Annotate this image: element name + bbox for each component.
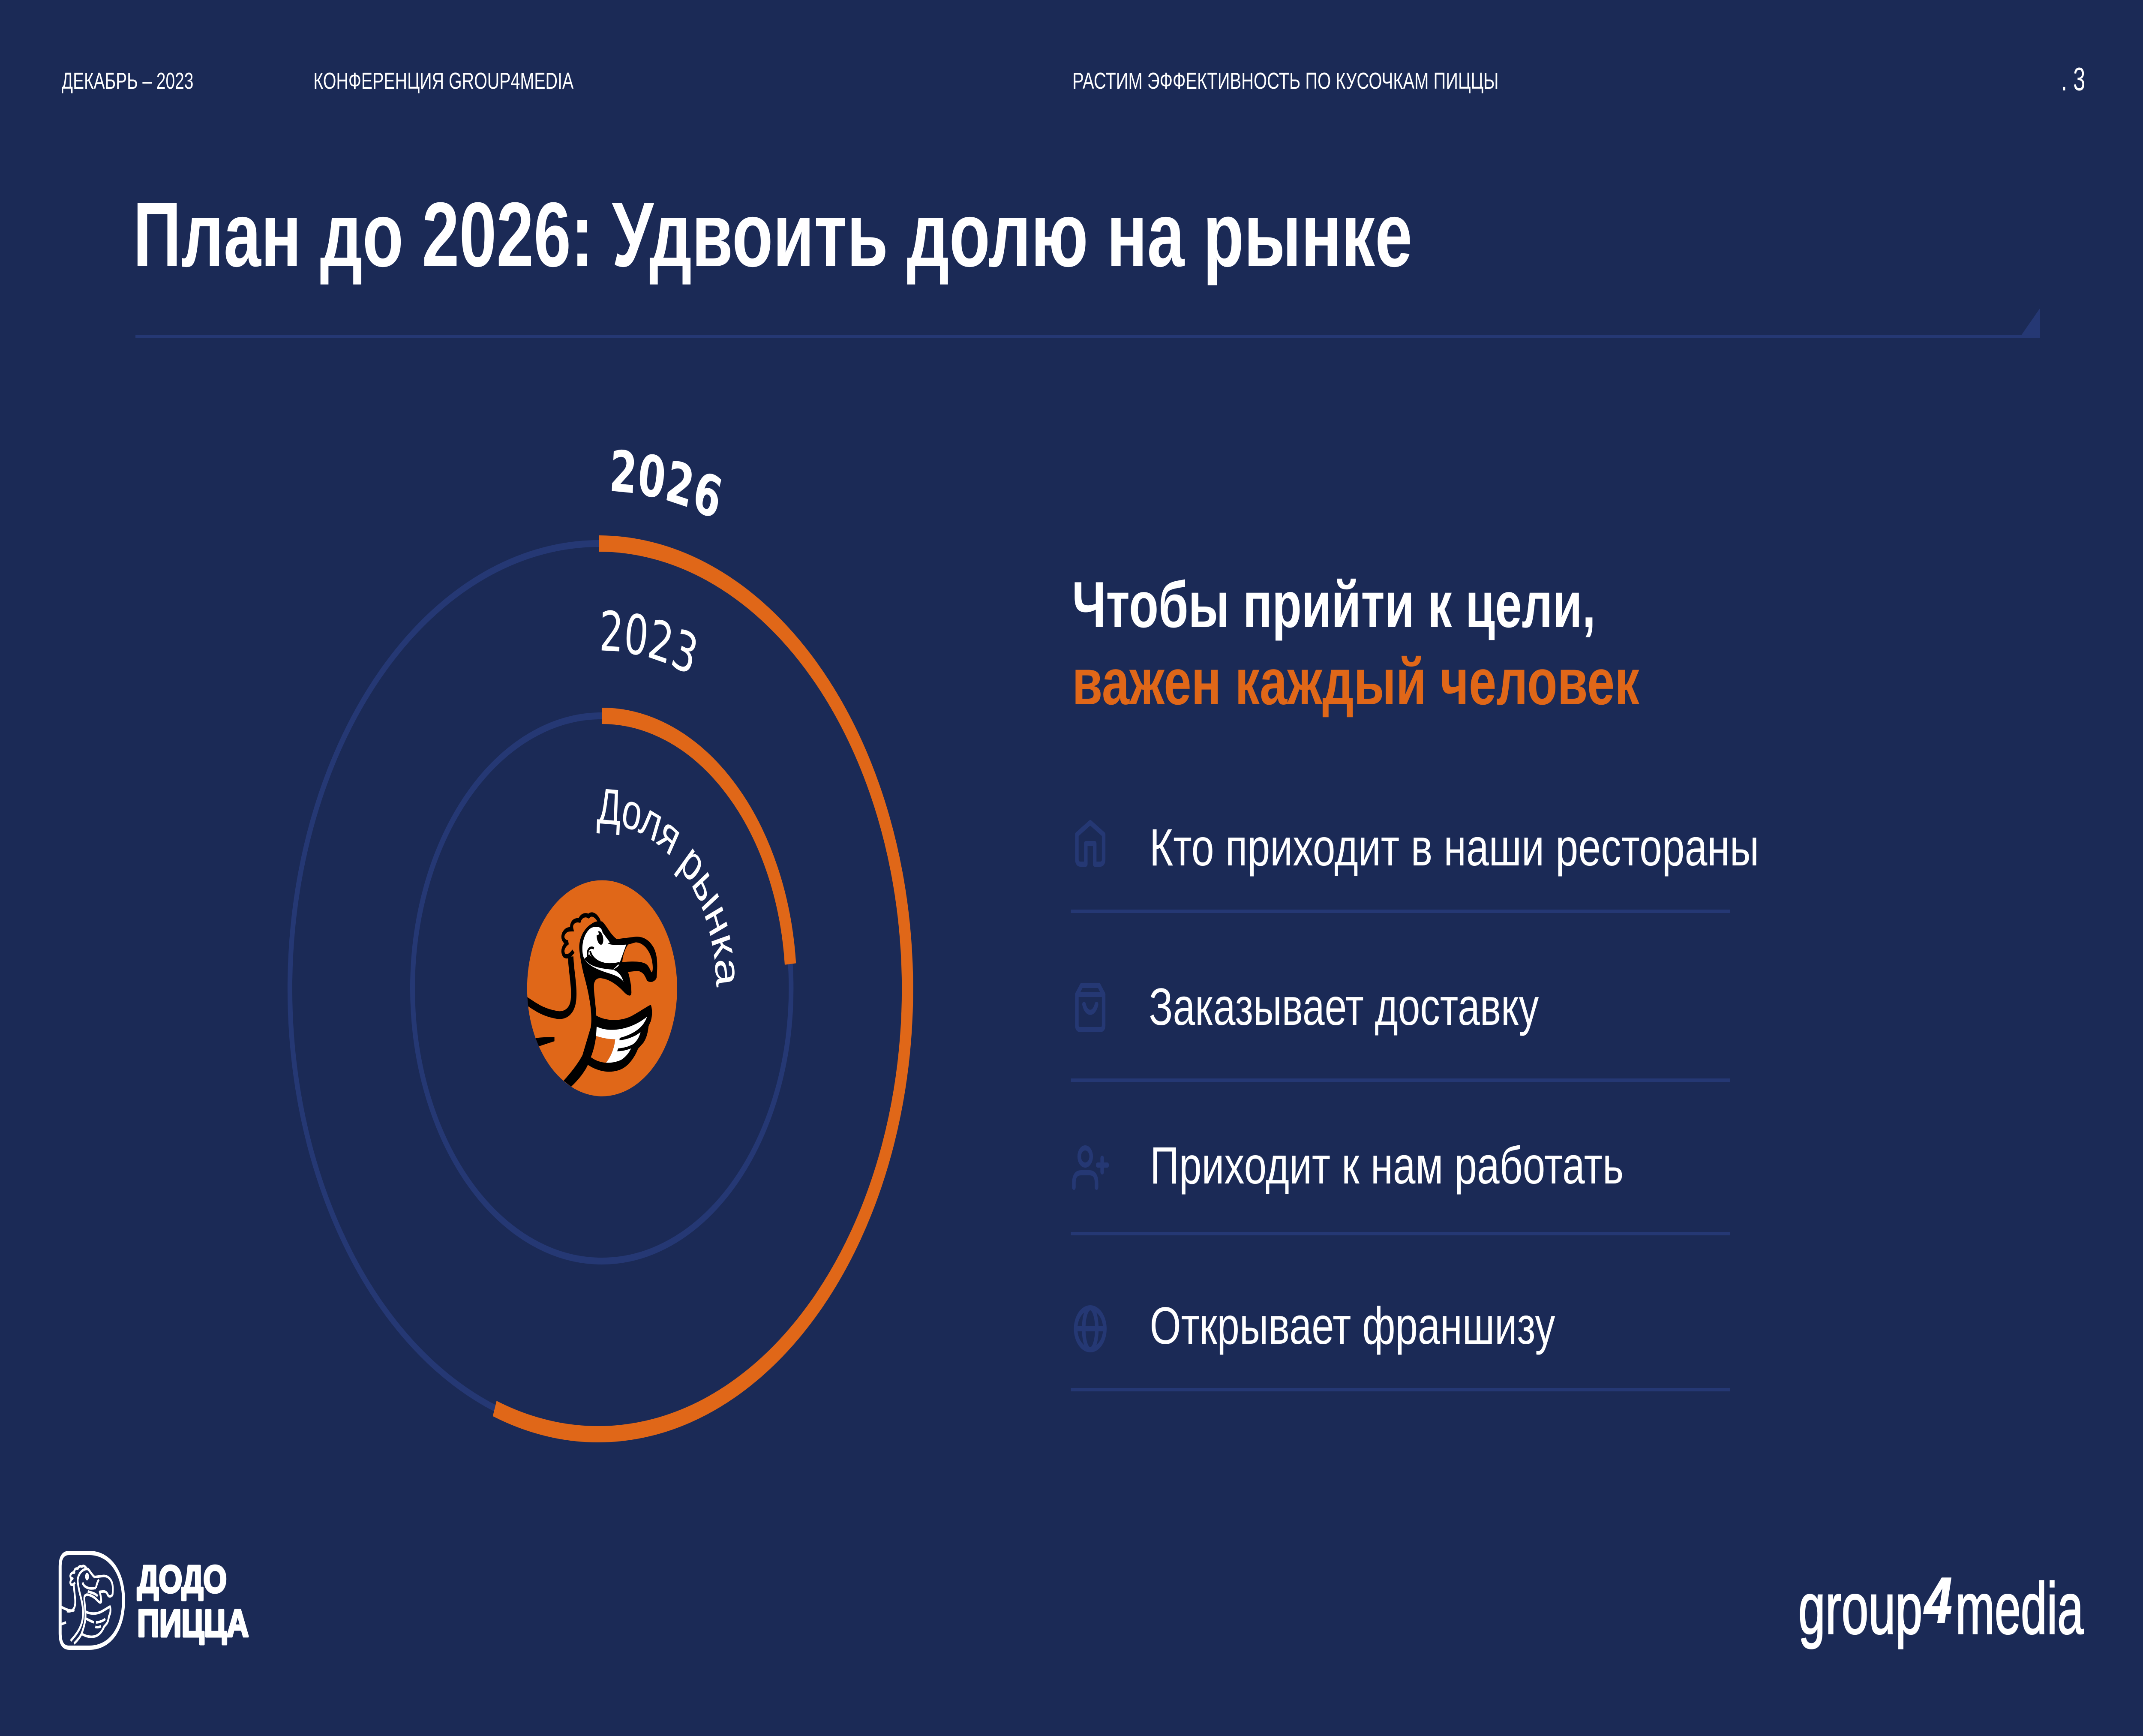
chart: concentric market share rings bbox=[290, 439, 908, 1434]
arc: 2026 share bbox=[495, 544, 907, 1434]
list item: restaurant visitors bbox=[1077, 818, 1759, 877]
logo: group4media: group bbox=[1798, 1568, 1922, 1649]
logo text: ПИЦЦА: ПИЦЦА bbox=[137, 1602, 249, 1645]
title rule with corner triangle bbox=[135, 309, 2040, 338]
icon: globe bbox=[1076, 1308, 1105, 1350]
header: date: ДЕКАБРЬ – 2023 bbox=[62, 68, 193, 94]
header: conference: КОНФЕРЕНЦИЯ GROUP4MEDIA bbox=[313, 68, 573, 94]
text: opens franchise: Открывает франшизу bbox=[1150, 1297, 1555, 1355]
header: page number: . 3 bbox=[2061, 61, 2085, 97]
text: comes to work: Приходит к нам работать bbox=[1150, 1136, 1624, 1195]
label: 2026: 2026 bbox=[608, 439, 727, 533]
icon: dodo bird in orange circle bbox=[526, 880, 677, 1096]
logo: Dodo Pizza bbox=[60, 1553, 249, 1648]
list item: delivery bbox=[1077, 978, 1539, 1036]
logo mark: D frame with bird bbox=[60, 1553, 123, 1648]
logo text: ДОДО: ДОДО bbox=[137, 1558, 227, 1601]
list item: opens franchise bbox=[1076, 1297, 1555, 1355]
icon: person with plus bbox=[1074, 1148, 1107, 1187]
heading: every person matters: важен каждый человек bbox=[1072, 646, 1639, 718]
label: market share: Доля рынка bbox=[596, 778, 748, 989]
ring: 2026 track bbox=[290, 544, 908, 1434]
logo: group4media: media bbox=[1955, 1568, 2084, 1649]
list item: comes to work bbox=[1074, 1136, 1624, 1195]
title: План до 2026: Удвоить долю на рынке bbox=[133, 183, 1412, 286]
arc: 2023 share bbox=[602, 716, 790, 964]
label: 2023: 2023 bbox=[598, 600, 703, 688]
icon: house bbox=[1077, 823, 1104, 864]
ring: 2023 track bbox=[412, 716, 791, 1261]
heading: to reach the goal: Чтобы прийти к цели, bbox=[1072, 568, 1596, 641]
text: restaurant visitors: Кто приходит в наши рестораны bbox=[1150, 818, 1759, 877]
text: delivery: Заказывает доставку bbox=[1149, 978, 1539, 1036]
header: talk name: РАСТИМ ЭФФЕКТИВНОСТЬ ПО КУСОЧКАМ ПИЦЦЫ bbox=[1072, 68, 1499, 94]
icon: shopping bag bbox=[1077, 985, 1104, 1030]
logo: group4media: 4 bbox=[1924, 1565, 1952, 1637]
